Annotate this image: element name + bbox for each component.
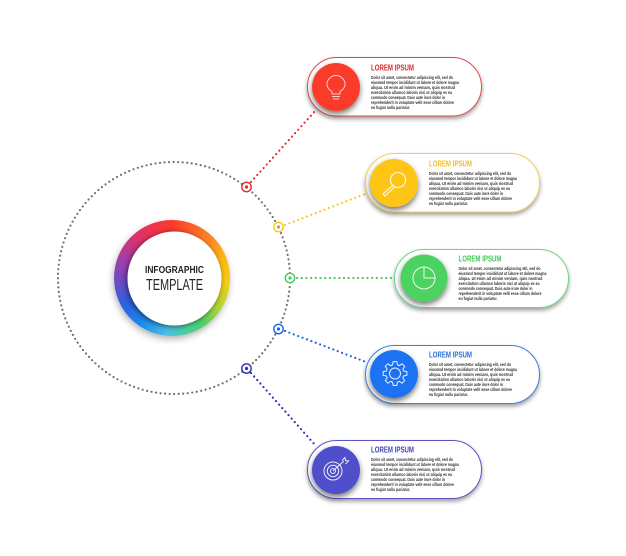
body text: eiusmod tempor incididunt ut labore et dolore magna — [429, 176, 517, 182]
heading: LOREM IPSUM — [371, 62, 414, 72]
icon: gear — [383, 362, 407, 385]
central white disc with title — [128, 232, 222, 326]
body text: exercitation ullamco laboris nisi ut aliquip ex ea — [429, 186, 510, 192]
panel: red card — [308, 58, 482, 116]
connector: blue — [285, 331, 366, 362]
node: green — [285, 273, 295, 283]
connector: green — [297, 277, 394, 279]
body text: commodo consequat. Duis aute irure dolor in — [458, 286, 533, 292]
heading: LOREM IPSUM — [429, 158, 472, 168]
body text: eiusmod tempor incididunt ut labore et dolore magna — [458, 271, 547, 277]
body text — [429, 171, 517, 207]
panel: blue card — [366, 346, 540, 404]
body text: exercitation ullamco laboris nisi ut aliquip ex ea — [429, 377, 510, 383]
body text — [429, 362, 517, 398]
body text: eu fugiat nulla pariatur. — [371, 487, 410, 493]
body text: commodo consequat. Duis aute irure dolor in — [429, 382, 503, 388]
body text: Dolor sit amet, consectetur adipiscing elit, sed do — [371, 457, 453, 463]
body text: aliqua. Ut enim ad minim veniam, quis nostrud — [371, 85, 455, 91]
heading: LOREM IPSUM — [371, 444, 414, 454]
body text: eiusmod tempor incididunt ut labore et dolore magna — [429, 367, 517, 373]
body text: eiusmod tempor incididunt ut labore et dolore magna — [371, 462, 459, 468]
large dotted orbit circle — [58, 162, 290, 394]
heading: LOREM IPSUM — [429, 350, 472, 360]
body text: eu fugiat nulla pariatur. — [458, 296, 498, 302]
panel: yellow card — [366, 154, 540, 212]
node: red — [242, 182, 251, 192]
body text: aliqua. Ut enim ad minim veniam, quis nostrud — [429, 181, 513, 187]
title: template: TEMPLATE — [146, 277, 203, 294]
body text: aliqua. Ut enim ad minim veniam, quis nostrud — [458, 276, 543, 282]
body text: reprehenderit in voluptate velit esse cillum dolore — [458, 291, 542, 297]
body text: reprehenderit in voluptate velit esse cillum dolore — [371, 100, 454, 106]
heading: LOREM IPSUM — [458, 254, 502, 264]
node: yellow — [274, 222, 283, 232]
body text: commodo consequat. Duis aute irure dolor in — [371, 477, 445, 483]
panel: indigo card — [308, 440, 482, 498]
body text: reprehenderit in voluptate velit esse cillum dolore — [429, 196, 512, 202]
body text: eu fugiat nulla pariatur. — [371, 105, 410, 111]
icon: target with arrow — [324, 458, 348, 480]
icon: magnifier — [383, 172, 406, 196]
body text: commodo consequat. Duis aute irure dolor in — [429, 191, 503, 197]
body text: reprehenderit in voluptate velit esse cillum dolore — [371, 482, 454, 488]
connector: red — [251, 110, 316, 182]
connector: yellow — [285, 194, 365, 225]
body text: aliqua. Ut enim ad minim veniam, quis nostrud — [429, 372, 513, 378]
node: blue — [274, 324, 283, 334]
body text: commodo consequat. Duis aute irure dolor in — [371, 95, 445, 101]
body text: exercitation ullamco laboris nisi ut aliquip ex ea — [458, 281, 540, 287]
body text: exercitation ullamco laboris nisi ut aliquip ex ea — [371, 90, 452, 96]
body text: Dolor sit amet, consectetur adipiscing elit, sed do — [429, 171, 511, 177]
body text: eu fugiat nulla pariatur. — [429, 201, 468, 207]
body text — [371, 75, 459, 111]
icon: light bulb — [327, 76, 345, 99]
body text: eu fugiat nulla pariatur. — [429, 392, 468, 398]
connector: indigo — [251, 373, 316, 446]
body text: Dolor sit amet, consectetur adipiscing elit, sed do — [458, 266, 541, 272]
title: infographic: INFOGRAPHIC — [145, 265, 204, 276]
node: indigo — [242, 364, 251, 373]
body text: aliqua. Ut enim ad minim veniam, quis nostrud — [371, 467, 455, 473]
body text: exercitation ullamco laboris nisi ut aliquip ex ea — [371, 472, 452, 478]
panel: green card — [394, 250, 568, 308]
body text: Dolor sit amet, consectetur adipiscing elit, sed do — [429, 362, 511, 368]
body text: eiusmod tempor incididunt ut labore et dolore magna — [371, 80, 459, 86]
icon: clock chart — [413, 267, 435, 289]
body text: reprehenderit in voluptate velit esse cillum dolore — [429, 387, 512, 393]
body text — [371, 457, 459, 493]
body text — [458, 266, 547, 302]
central rainbow ring — [114, 220, 230, 336]
body text: Dolor sit amet, consectetur adipiscing elit, sed do — [371, 75, 453, 81]
